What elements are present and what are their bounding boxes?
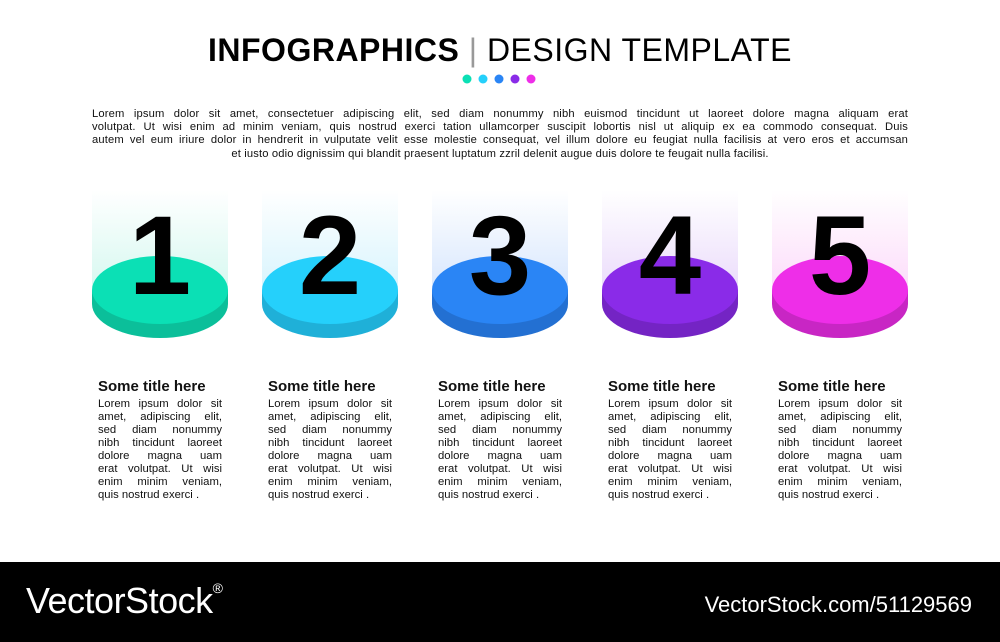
- title 4: Some title here: [608, 378, 716, 395]
- number 4: 4: [639, 193, 701, 318]
- body 2: erat volutpat. Ut wisi: [268, 463, 392, 475]
- body 1: Lorem ipsum dolor sit: [98, 398, 222, 410]
- body 3: nibh tincidunt laoreet: [438, 437, 562, 449]
- number 3: 3: [469, 193, 531, 318]
- body 1: enim minim veniam,: [98, 476, 222, 488]
- body 4: [608, 398, 732, 501]
- number 5: 5: [809, 193, 871, 318]
- body 4: enim minim veniam,: [608, 476, 732, 488]
- body 2: [268, 398, 392, 501]
- body 5: enim minim veniam,: [778, 476, 902, 488]
- body 2: quis nostrud exerci .: [268, 489, 369, 501]
- footer logo: VectorStock®: [26, 580, 222, 621]
- step 1: [92, 193, 228, 501]
- body 1: amet, adipiscing elit,: [98, 411, 222, 423]
- body 3: Lorem ipsum dolor sit: [438, 398, 562, 410]
- body 3: [438, 398, 562, 501]
- step 2: [262, 193, 398, 501]
- body 5: erat volutpat. Ut wisi: [778, 463, 902, 475]
- body 4: nibh tincidunt laoreet: [608, 437, 732, 449]
- title 2: Some title here: [268, 378, 376, 395]
- color dots: [462, 74, 536, 84]
- body 1: [98, 398, 222, 501]
- intro text: volutpat. Ut wisi enim ad minim veniam, quis nostrud exerci tation ullamcorper suscipit lobortis nisl ut aliquip ex ea commodo consequat. Duis: [92, 121, 908, 133]
- body 4: erat volutpat. Ut wisi: [608, 463, 732, 475]
- body 4: quis nostrud exerci .: [608, 489, 709, 501]
- title 3: Some title here: [438, 378, 546, 395]
- body 5: sed diam nonummy: [778, 424, 902, 436]
- disc 5: [772, 256, 908, 338]
- step 5: [772, 193, 908, 501]
- number 2: 2: [299, 193, 361, 318]
- body 3: erat volutpat. Ut wisi: [438, 463, 562, 475]
- body 1: nibh tincidunt laoreet: [98, 437, 222, 449]
- disc 3: [432, 256, 568, 338]
- body 1: sed diam nonummy: [98, 424, 222, 436]
- body 3: dolore magna uam: [438, 450, 562, 462]
- body 4: amet, adipiscing elit,: [608, 411, 732, 423]
- title 1: Some title here: [98, 378, 206, 395]
- body 5: [778, 398, 902, 501]
- body 3: quis nostrud exerci .: [438, 489, 539, 501]
- body 4: Lorem ipsum dolor sit: [608, 398, 732, 410]
- body 3: amet, adipiscing elit,: [438, 411, 562, 423]
- footer: [0, 562, 1000, 642]
- body 2: enim minim veniam,: [268, 476, 392, 488]
- intro text: et iusto odio dignissim qui blandit praesent luptatum zzril delenit augue duis dolore te feugait nulla facilisi.: [231, 148, 769, 160]
- intro text: [92, 108, 908, 160]
- disc 2: [262, 256, 398, 338]
- body 4: dolore magna uam: [608, 450, 732, 462]
- body 2: sed diam nonummy: [268, 424, 392, 436]
- body 1: quis nostrud exerci .: [98, 489, 199, 501]
- body 2: amet, adipiscing elit,: [268, 411, 392, 423]
- intro text: Lorem ipsum dolor sit amet, consectetuer adipiscing elit, sed diam nonummy nibh euismod tincidunt ut laoreet dolore magna aliquam erat: [92, 108, 908, 120]
- body 2: dolore magna uam: [268, 450, 392, 462]
- body 1: erat volutpat. Ut wisi: [98, 463, 222, 475]
- body 3: sed diam nonummy: [438, 424, 562, 436]
- body 1: dolore magna uam: [98, 450, 222, 462]
- number 1: 1: [129, 193, 191, 318]
- disc 1: [92, 256, 228, 338]
- body 3: enim minim veniam,: [438, 476, 562, 488]
- body 5: amet, adipiscing elit,: [778, 411, 902, 423]
- body 5: dolore magna uam: [778, 450, 902, 462]
- body 5: quis nostrud exerci .: [778, 489, 879, 501]
- disc 4: [602, 256, 738, 338]
- intro text: autem vel eum iriure dolor in hendrerit in vulputate velit esse molestie consequat, vel illum dolore eu feugiat nulla facilisis at vero eros et accumsan: [92, 134, 908, 146]
- footer id: VectorStock.com/51129569: [705, 592, 972, 617]
- step 3: [432, 193, 568, 501]
- title 5: Some title here: [778, 378, 886, 395]
- body 4: sed diam nonummy: [608, 424, 732, 436]
- title: INFOGRAPHICS | DESIGN TEMPLATE: [208, 32, 792, 68]
- step 4: [602, 193, 738, 501]
- body 5: Lorem ipsum dolor sit: [778, 398, 902, 410]
- body 2: nibh tincidunt laoreet: [268, 437, 392, 449]
- body 5: nibh tincidunt laoreet: [778, 437, 902, 449]
- body 2: Lorem ipsum dolor sit: [268, 398, 392, 410]
